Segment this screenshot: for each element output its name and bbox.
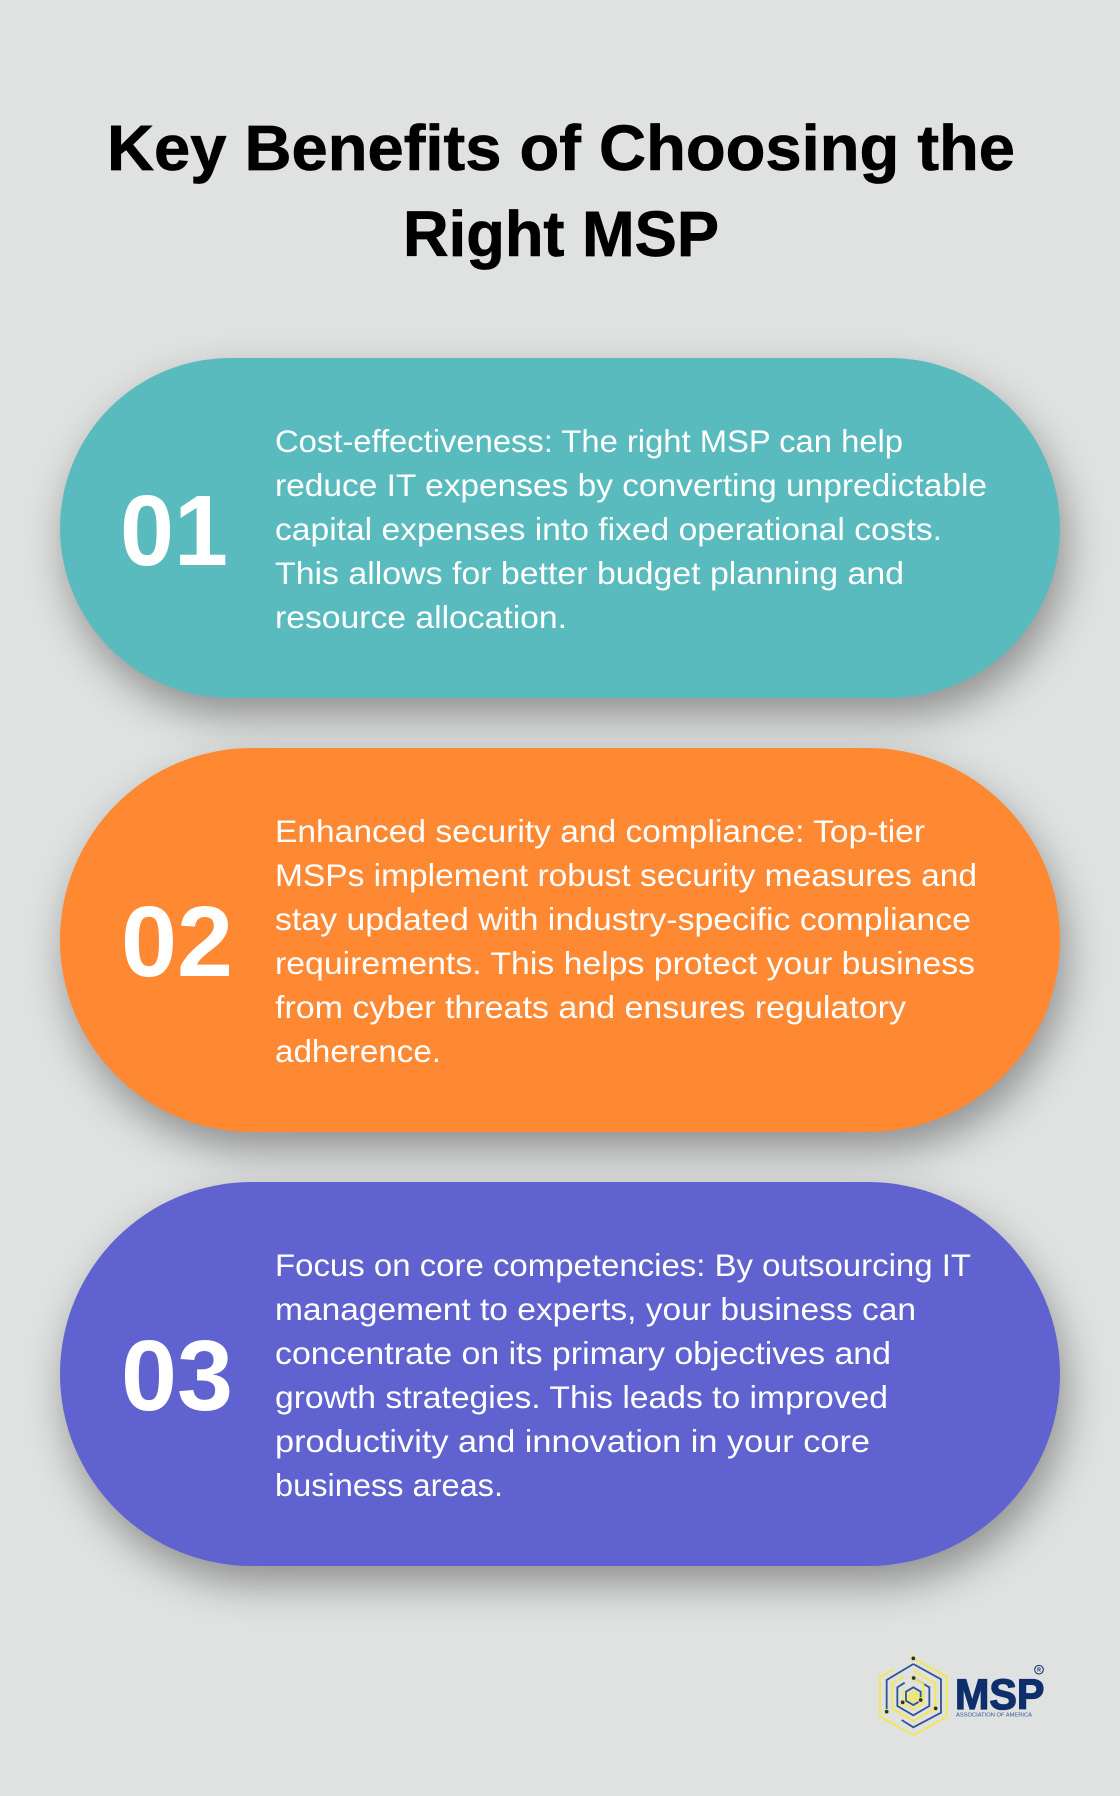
panel 3 text: growth strategies. This leads to improved — [275, 1379, 888, 1415]
panel 3 background pill — [60, 1182, 1060, 1566]
panel 2 text: MSPs implement robust security measures and — [275, 857, 977, 893]
panel: security and compliance — [60, 748, 1060, 1132]
panel 2 text — [275, 813, 977, 1069]
panel 3 text: Focus on core competencies: By outsourcing IT — [275, 1247, 971, 1283]
icon: hexagon circuit — [880, 1656, 947, 1735]
panel 1 background pill — [60, 358, 1060, 698]
panel 3 text: concentrate on its primary objectives and — [275, 1335, 891, 1371]
panel 2 text: from cyber threats and ensures regulatory — [275, 989, 906, 1025]
panel 1 text: reduce IT expenses by converting unpredictable — [275, 467, 987, 503]
number 02: 02 — [121, 886, 233, 998]
tagline: ASSOCIATION OF AMERICA — [956, 1712, 1032, 1718]
panel 2 text: Enhanced security and compliance: Top-tier — [275, 813, 925, 849]
panel 2 text: adherence. — [275, 1033, 441, 1069]
title: Right MSP — [403, 198, 719, 270]
panel 1 text: resource allocation. — [275, 599, 567, 635]
panel: cost-effectiveness — [60, 358, 1060, 698]
panel 2 background pill — [60, 748, 1060, 1132]
title: Key Benefits of Choosing the — [107, 112, 1015, 184]
panel 3 text: management to experts, your business can — [275, 1291, 916, 1327]
registered mark — [1035, 1665, 1043, 1674]
panel 2 text: stay updated with industry-specific compliance — [275, 901, 971, 937]
panel 1 text — [275, 423, 987, 635]
panel 1 text: Cost-effectiveness: The right MSP can help — [275, 423, 903, 459]
panel 3 text — [275, 1247, 971, 1503]
panel 3 text: business areas. — [275, 1467, 503, 1503]
panel 2 text: requirements. This helps protect your business — [275, 945, 975, 981]
logo: MSP Association of America — [880, 1656, 1044, 1735]
panel 1 text: This allows for better budget planning and — [275, 555, 904, 591]
title — [107, 112, 1015, 270]
panel 1 text: capital expenses into fixed operational costs. — [275, 511, 942, 547]
number 03: 03 — [121, 1320, 233, 1432]
panel 3 text: productivity and innovation in your core — [275, 1423, 870, 1459]
number 01: 01 — [120, 475, 228, 587]
registered mark: R — [1037, 1668, 1041, 1674]
wordmark MSP: MSP — [955, 1671, 1044, 1719]
panel: core competencies — [60, 1182, 1060, 1566]
